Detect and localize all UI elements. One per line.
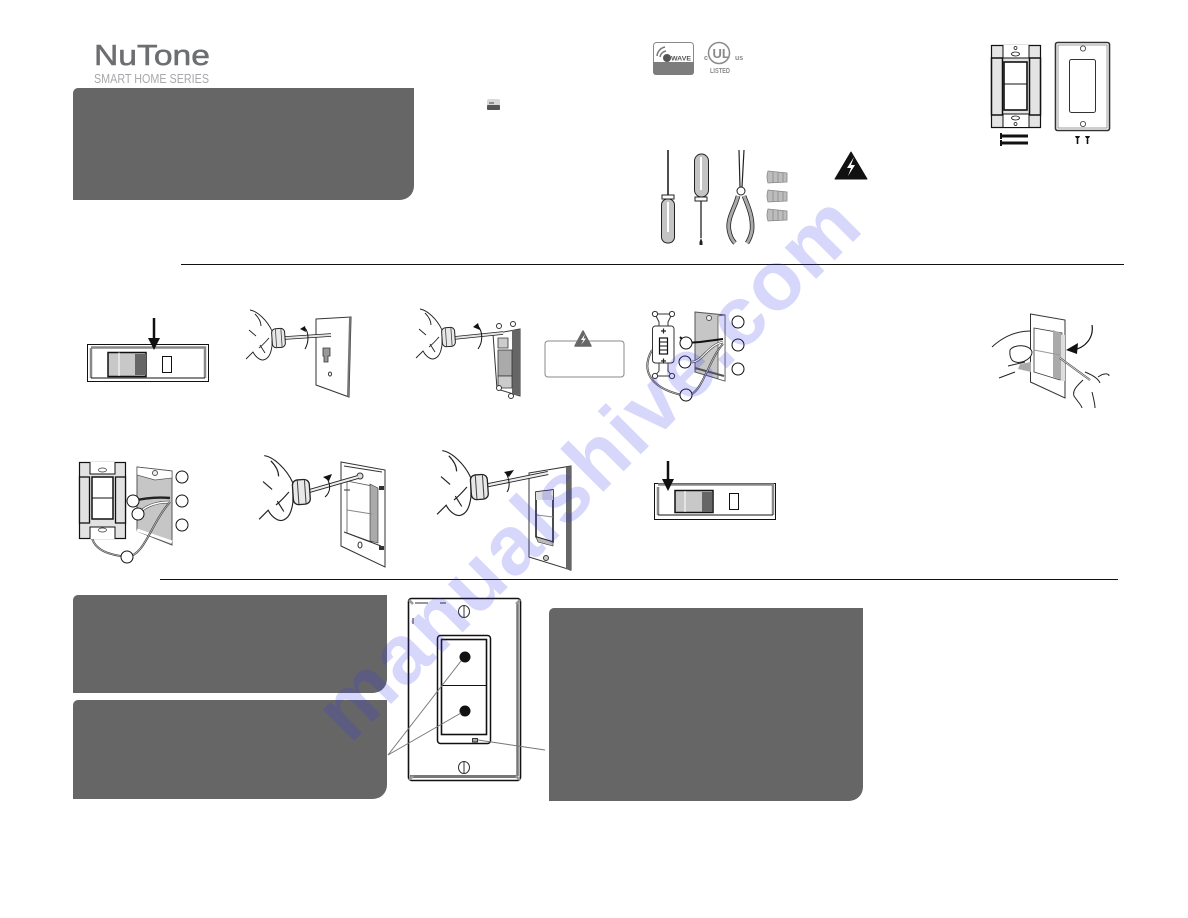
- diagram: installed switch front view: [408, 598, 520, 780]
- logo: NuTone Smart Home Series: NuTone: [94, 40, 210, 72]
- icon: z-wave logo: [653, 42, 694, 75]
- diagram: attach new wall plate: [437, 451, 571, 571]
- divider: [160, 578, 1118, 580]
- icon: flat screwdriver: [694, 154, 708, 245]
- icon: UL listed mark: LISTED: [710, 68, 730, 75]
- diagram: removing switch label by hand: [992, 314, 1109, 408]
- diagram: breaker panel on: [654, 461, 776, 520]
- icon: UL listed mark: UL: [712, 46, 730, 61]
- icon: UL listed mark: c: [704, 55, 708, 62]
- callout: leader line to LED: [478, 740, 545, 750]
- icon: phillips screwdriver: [662, 150, 674, 243]
- panel: lower centre block: [549, 608, 863, 801]
- watermark: manualshive.com: [296, 176, 878, 758]
- logo: NuTone Smart Home Series: [94, 40, 210, 86]
- panel: top header block: [73, 88, 414, 200]
- icon: wire nuts: [767, 171, 787, 221]
- diagram: remove old switch screw: [416, 309, 520, 398]
- divider: [181, 264, 1124, 266]
- diagram: remove wall plate screw: [246, 310, 351, 397]
- icon: small plate screws: [1075, 136, 1090, 144]
- icon: switch device in kit: [992, 45, 1040, 128]
- icon: electrical warning triangle: [835, 152, 867, 179]
- icon: z-wave logo: WAVE: [671, 56, 692, 62]
- panel: lower left lower block: [73, 700, 387, 799]
- logo: NuTone Smart Home Series: SMART HOME SERIES: [94, 72, 209, 86]
- icon: long mounting screws: [1000, 133, 1028, 146]
- diagram: breaker panel off: [88, 318, 208, 382]
- icon: wall plate in kit: [1056, 42, 1110, 130]
- diagram: new switch wiring: [80, 462, 188, 563]
- diagram: fasten new switch: [259, 456, 385, 567]
- diagram: old switch wiring: [647, 311, 744, 401]
- icon: small z-wave mark: [487, 99, 500, 110]
- icon: UL listed mark: [704, 42, 743, 75]
- callout: warning box: [545, 331, 624, 377]
- panel: lower left upper block: [73, 595, 387, 693]
- callout: leader lines to buttons: [388, 661, 461, 755]
- icon: needle-nose pliers: [729, 150, 752, 243]
- icon: UL listed mark: us: [735, 55, 743, 62]
